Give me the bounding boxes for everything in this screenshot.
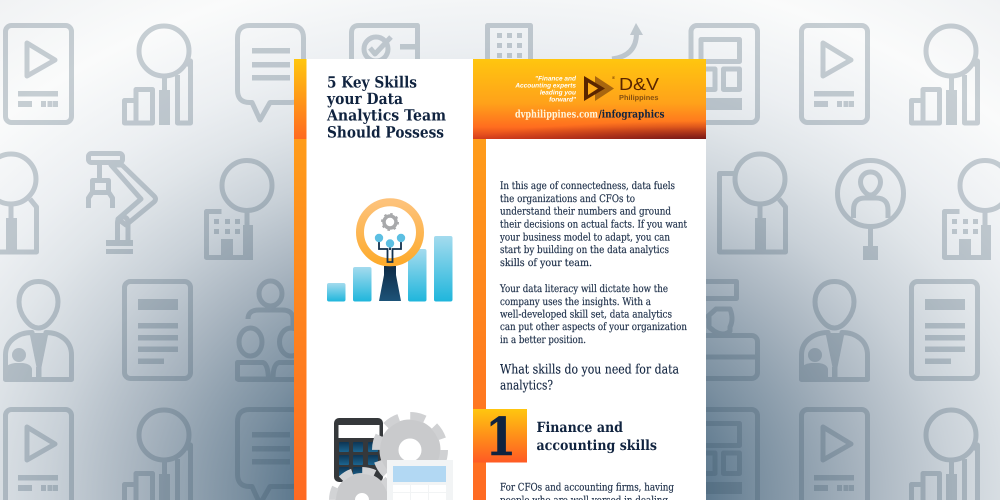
icon: video document, row 1 right bbox=[802, 26, 868, 122]
text block: finance paragraph bbox=[500, 482, 674, 500]
icon: magnifier over bar chart, row 1 bbox=[124, 26, 190, 125]
tagline bbox=[514, 76, 577, 104]
icon: magnifier shape, row 2 right bbox=[720, 154, 786, 254]
title: Analytics Team bbox=[326, 106, 447, 125]
icon: magnifier over bar chart, row 4 right bbox=[912, 410, 978, 500]
heading: finance and accounting skills: Finance and bbox=[536, 420, 623, 436]
title: your Data bbox=[326, 89, 403, 108]
centre orange strip bbox=[473, 139, 486, 500]
icon: person in magnifier bbox=[838, 160, 904, 260]
icon: magnifier over building, right bbox=[944, 160, 1000, 260]
icon: business person, row 3 left bbox=[6, 282, 72, 382]
heading: finance and accounting skills: accounting skills bbox=[536, 438, 657, 454]
icon: robot arm bbox=[88, 154, 156, 254]
icon: business person, row 3 right bbox=[802, 282, 868, 382]
tagline: "Finance and bbox=[535, 76, 577, 82]
logo wordmark: D&V bbox=[619, 74, 659, 94]
title: 5 Key Skills bbox=[327, 72, 417, 91]
tagline: leading you bbox=[540, 90, 576, 96]
title bbox=[326, 72, 447, 141]
icon: people group bbox=[238, 281, 315, 380]
panel: infographic page bbox=[294, 59, 706, 500]
icon: magnifier over bar chart, row 4 bbox=[124, 410, 190, 500]
icon: video document, row 4 left bbox=[6, 410, 72, 500]
text block: introduction paragraph: the organizations and CFOs to bbox=[500, 193, 635, 205]
text block: data literacy paragraph: in a better position. bbox=[500, 334, 586, 346]
icon: data analytics magnifier over bars bbox=[327, 202, 452, 302]
heading: finance and accounting skills bbox=[536, 420, 657, 454]
heading: what skills bbox=[500, 362, 679, 394]
icon: text document, row 3 left bbox=[124, 282, 190, 378]
heading: what skills: What skills do you need for data bbox=[500, 362, 679, 378]
logo wordmark: ® bbox=[612, 75, 615, 80]
icon: stacked books bbox=[691, 282, 758, 378]
tagline: forward" bbox=[549, 96, 577, 104]
text block: data literacy paragraph: company uses the insights. With a bbox=[500, 296, 651, 308]
text block: introduction paragraph: their decisions on actual facts. If you want bbox=[500, 218, 688, 230]
tagline: Accounting experts bbox=[514, 82, 576, 90]
icon: text document, row 3 right bbox=[912, 282, 978, 378]
text block: introduction paragraph: your business model to adapt, you can bbox=[499, 232, 670, 244]
icon: layout, row 1 right bbox=[691, 26, 758, 122]
icon: office building bbox=[488, 26, 530, 59]
icon: magnifier over building bbox=[206, 160, 272, 260]
text block: data literacy paragraph: Your data literacy will dictate how the bbox=[499, 283, 668, 295]
number badge: 1 bbox=[473, 407, 527, 468]
text block: introduction paragraph: start by building on the data analytics bbox=[500, 244, 669, 256]
left orange strip bbox=[294, 59, 306, 500]
heading: what skills: analytics? bbox=[500, 378, 553, 394]
website address: dvphilippines.com bbox=[515, 108, 598, 120]
icon: upward arrow bbox=[612, 23, 643, 59]
panel: header banner bbox=[473, 59, 706, 139]
icon: video document, row 4 right bbox=[802, 410, 868, 500]
text block: introduction paragraph bbox=[499, 180, 688, 269]
text block: data literacy paragraph: can put other aspects of your organization bbox=[500, 321, 687, 333]
logo wordmark: Philippines bbox=[619, 93, 658, 102]
icon: magnifier shape, row 2 left bbox=[0, 154, 36, 254]
text block: finance paragraph: For CFOs and accounting firms, having bbox=[500, 482, 674, 494]
title: Should Possess bbox=[327, 122, 444, 141]
logo wordmark bbox=[612, 74, 659, 102]
text block: introduction paragraph: skills of your team. bbox=[500, 257, 592, 269]
icon: D&V logo arrows bbox=[584, 76, 614, 101]
icon: layout, row 4 bbox=[691, 410, 758, 500]
text block: introduction paragraph: understand their numbers and ground bbox=[500, 206, 671, 218]
icon: magnifier over bar chart, row 1 right bbox=[912, 26, 978, 125]
icon: calculator, gears and spreadsheet bbox=[332, 416, 453, 500]
icon: checklist bbox=[352, 26, 418, 61]
icon: speech bubble, row 1 bbox=[238, 26, 304, 120]
website address: /infographics bbox=[598, 108, 665, 120]
text block: introduction paragraph: In this age of connectedness, data fuels bbox=[500, 180, 675, 192]
text block: data literacy paragraph: well-developed skill set, data analytics bbox=[500, 308, 672, 320]
text block: data literacy paragraph bbox=[499, 283, 687, 346]
icon: speech bubble, row 4 bbox=[238, 410, 304, 500]
icon: video document, row 1 left bbox=[6, 26, 72, 122]
number badge: 1: 1 bbox=[486, 407, 516, 468]
